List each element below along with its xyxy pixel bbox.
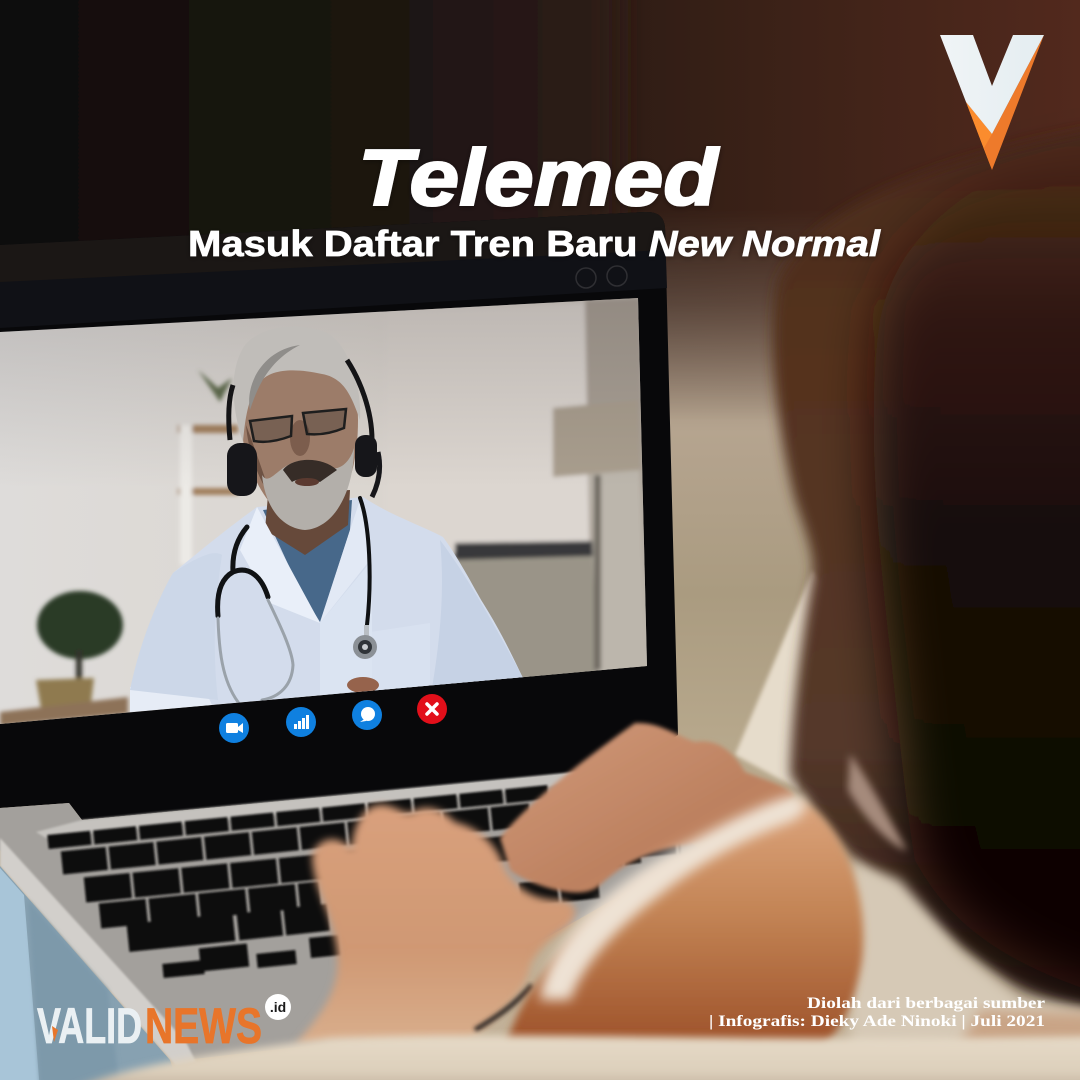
keyboard keys bbox=[48, 792, 680, 971]
hand: lower left bbox=[295, 805, 575, 1045]
hand bbox=[347, 677, 379, 693]
logo: Valid News: NEWS bbox=[145, 998, 262, 1054]
plant bbox=[37, 591, 123, 659]
logo: V mark bbox=[940, 35, 1044, 170]
pocket bbox=[372, 686, 430, 691]
icon: signal button bbox=[286, 707, 316, 737]
highlight strip bbox=[36, 772, 600, 838]
lamp bbox=[553, 400, 640, 477]
screen bbox=[0, 290, 660, 730]
logo: Valid News: VALID bbox=[37, 998, 142, 1054]
hands bbox=[295, 723, 795, 1045]
hair bbox=[773, 120, 1080, 1015]
subtitle: Masuk Daftar Tren Baru New Normal bbox=[188, 223, 881, 264]
bottom lip of laptop bbox=[0, 838, 196, 1066]
credit text bbox=[709, 995, 1045, 1030]
laptop lid bbox=[0, 212, 678, 820]
credit text: Diolah dari berbagai sumber bbox=[807, 995, 1045, 1012]
headset bbox=[229, 360, 372, 440]
title: Telemed bbox=[358, 133, 720, 222]
neck bbox=[265, 490, 350, 555]
hand: upper right bbox=[500, 723, 795, 893]
title block bbox=[188, 133, 881, 264]
placket bbox=[320, 560, 372, 695]
icon: camera button bbox=[219, 713, 249, 743]
blanket foreground bbox=[60, 1035, 1080, 1080]
window controls bbox=[576, 266, 627, 288]
icon: close button bbox=[417, 694, 447, 724]
laptop base bbox=[0, 770, 700, 1060]
credit text: | Infografis: Dieky Ade Ninoki | Juli 2021 bbox=[709, 1013, 1045, 1030]
gray hair bbox=[234, 348, 360, 442]
glasses bbox=[250, 409, 346, 442]
cream fabric right of shoulder bbox=[850, 860, 1080, 1080]
stethoscope bell bbox=[353, 625, 377, 659]
logo: Valid News bbox=[37, 994, 291, 1054]
icon: chat button bbox=[352, 700, 382, 730]
lapels bbox=[240, 507, 320, 623]
face bbox=[243, 370, 358, 500]
top dark gradient band bbox=[0, 0, 1080, 420]
logo: Valid News: .id bbox=[270, 999, 286, 1015]
doctor coat bbox=[130, 497, 523, 712]
shirt bbox=[263, 500, 352, 622]
beard bbox=[262, 448, 354, 530]
room background bbox=[0, 298, 648, 726]
shelf bbox=[178, 425, 238, 495]
jeans bbox=[0, 866, 180, 1080]
laptop bbox=[0, 212, 700, 1066]
stethoscope bbox=[218, 498, 370, 702]
shoulder bbox=[505, 795, 863, 1050]
